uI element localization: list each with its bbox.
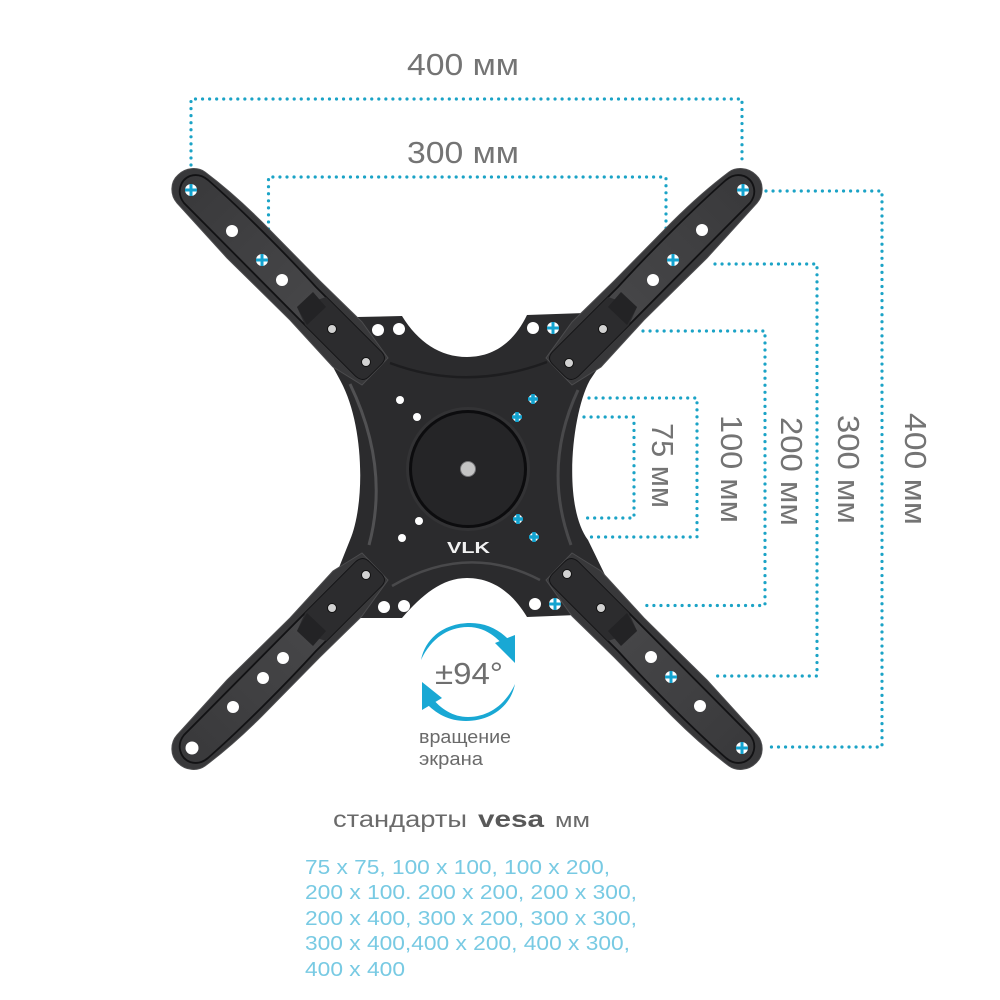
rotation caption: экрана	[419, 748, 484, 769]
bolts: silver	[328, 324, 608, 612]
arm: bottom right	[546, 553, 762, 769]
dimension: 400 mm vertical bracket	[766, 191, 882, 747]
rotation caption: вращение	[419, 726, 511, 747]
plate silhouette	[330, 313, 605, 618]
rotation angle: ±94°	[435, 656, 503, 691]
label: 100 mm right: 100 мм	[714, 415, 749, 523]
text block: VESA sizes list: 200 x 100. 200 x 200, 200 x 300,	[305, 882, 637, 904]
dimension: 400 mm horizontal bracket	[191, 99, 742, 165]
rotation caption	[419, 726, 511, 769]
label: 400 mm top: 400 мм	[407, 47, 519, 82]
label: 400 mm right: 400 мм	[898, 413, 933, 525]
arm: top right	[546, 169, 762, 385]
heading: VESA standards	[333, 806, 590, 832]
arm: bottom left	[172, 553, 388, 769]
arm: top left	[172, 169, 388, 385]
mounting holes: white	[186, 224, 708, 754]
text block: VESA sizes list: 400 x 400	[305, 959, 405, 981]
dimension: 300 mm vertical bracket	[715, 264, 817, 676]
dimension: 100 mm vertical bracket	[589, 398, 697, 537]
heading: VESA standards: vesa	[478, 806, 544, 832]
plate ridges	[350, 362, 578, 586]
dimension: 200 mm vertical bracket	[643, 331, 765, 606]
text block: VESA sizes list: 200 x 400, 300 x 200, 300 x 300,	[305, 908, 637, 930]
VESA mount bracket	[172, 169, 762, 769]
label: 200 mm right: 200 мм	[774, 417, 809, 526]
dimension: 300 mm horizontal bracket	[268, 177, 666, 229]
dimension: 75 mm vertical bracket	[584, 417, 634, 518]
text block: VESA sizes list	[305, 857, 637, 981]
rotating disc	[406, 407, 530, 531]
label: 300 mm top: 300 мм	[407, 135, 519, 170]
mounting holes: highlighted blue	[185, 184, 749, 754]
brand logo: VLK: VLK	[447, 540, 491, 557]
heading: VESA standards: мм	[555, 810, 590, 832]
text block: VESA sizes list: 75 x 75, 100 x 100, 100 x 200,	[305, 857, 610, 879]
label: 300 mm right: 300 мм	[831, 415, 866, 524]
text block: VESA sizes list: 300 x 400,400 x 200, 400 x 300,	[305, 933, 630, 955]
rotation icon	[421, 623, 515, 721]
label: 75 mm right: 75 мм	[645, 423, 680, 508]
heading: VESA standards: стандарты	[333, 806, 467, 832]
